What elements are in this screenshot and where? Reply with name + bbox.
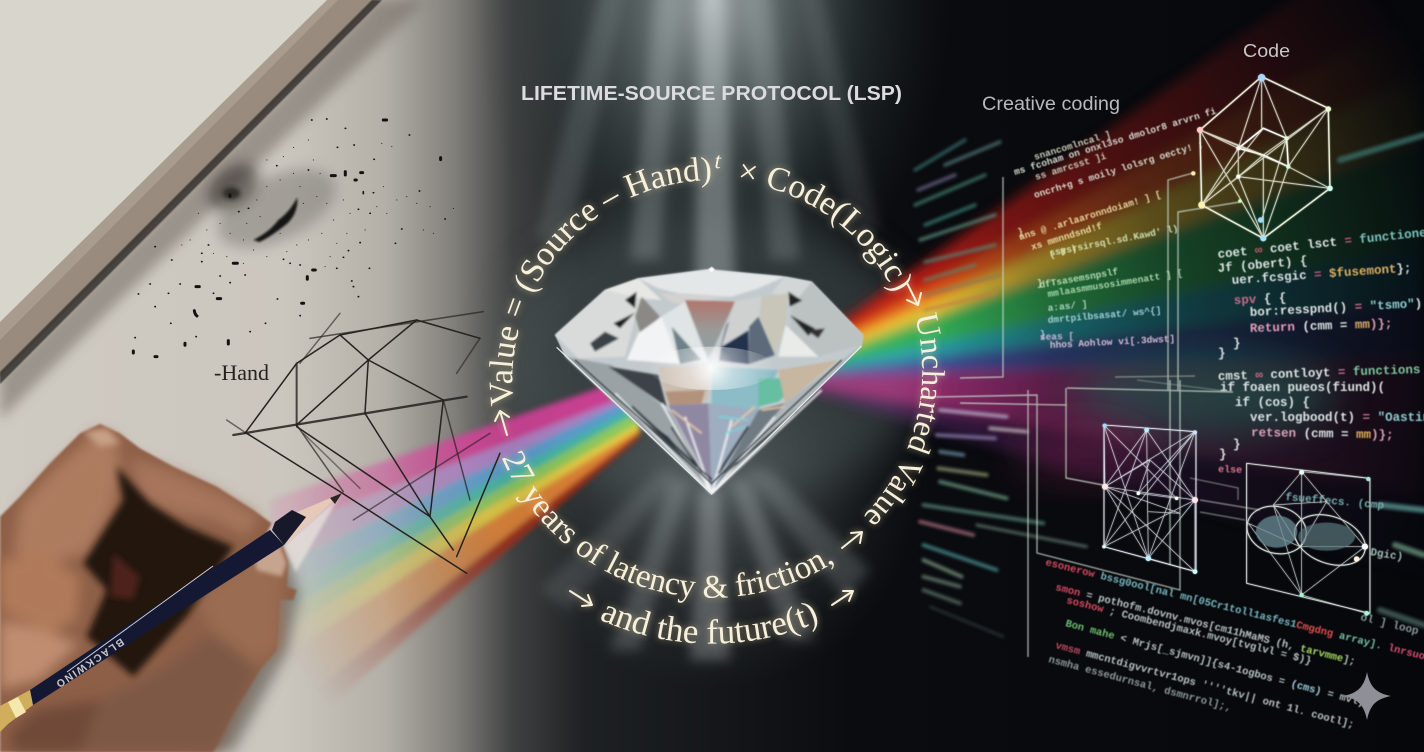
code block: main functions column: else	[1218, 464, 1242, 477]
arrow: into future line	[570, 591, 592, 606]
right rainbow beam	[812, 0, 1420, 531]
code block: creative coding column: ssysrsirsql.sd.Kawd' l)	[1048, 223, 1179, 259]
brilliant center flare	[648, 347, 775, 390]
code block: main functions column: }	[1219, 448, 1227, 462]
teal glow behind the lattice	[1075, 353, 1335, 437]
code block: creative coding column: snancomlncal ]	[1033, 129, 1112, 163]
code block: main functions column	[1217, 225, 1424, 638]
code block: creative coding column: ( 8 )	[1048, 243, 1078, 261]
code block: bottom perspective lines: smon = pothofm.dovnv.mvos[cm11hMaMS (h, tarvmme];	[1054, 582, 1357, 669]
faint code columns	[915, 135, 1424, 637]
label: -Hand: -Hand	[214, 360, 269, 385]
code block: main functions column: ol ] loop	[1359, 612, 1420, 638]
code block: creative coding column: }	[1017, 226, 1024, 238]
arrow: friction to value	[842, 532, 862, 548]
code block: creative coding column: seas [	[1040, 331, 1074, 343]
code block: main functions column: spv { {	[1233, 291, 1287, 308]
graphite dust	[133, 119, 454, 357]
ambient halo behind the diamond	[495, 210, 925, 510]
code block: main functions column: fsueffecs. (cmp	[1285, 492, 1385, 513]
code block: creative coding column: }	[1037, 278, 1043, 289]
label: Code: Code	[1243, 41, 1290, 61]
ring: 27 years of latency: 27 years of latency & friction,	[500, 450, 837, 606]
code block: bottom perspective lines: vmsm mmcntdigvvrtvr1ops ''''tkv|| ont 1l. cootl];	[1054, 640, 1355, 732]
code block: creative coding column: dmrtpilbsasat/ ws^{]	[1047, 305, 1162, 326]
code block: bottom perspective lines	[1044, 557, 1424, 732]
code block: bottom perspective lines: Bon mahe < Mrjs[_sjmvn]]{s4-1ogbos = (cms) = mvl);	[1064, 618, 1371, 711]
code block: bottom perspective lines: nsmha essedurnsal, dsmnrrol];,	[1047, 654, 1233, 715]
code block: creative coding column: ms fcoham on onxl3so dmolor8 arvrn fi	[1013, 106, 1218, 178]
code block: main functions column: if (cos) {	[1235, 396, 1310, 410]
code block: creative coding column: ans @ .arlaaronndoiam! ] [	[1018, 189, 1163, 243]
code block: creative coding column: a:as/ ]	[1047, 299, 1088, 314]
shadow under the hand	[187, 543, 300, 752]
code block: main functions column: Return (cmm = mm)};	[1250, 317, 1393, 336]
code block: bottom perspective lines: soshow ; Coombendjmaxk.mvoy[tvglvl = $)}	[1065, 595, 1313, 668]
pencil brand text: BLACKWINO	[54, 636, 126, 690]
top light glow	[430, 0, 1030, 340]
wireframe: organic form in frame	[1242, 463, 1372, 616]
crown facets	[555, 290, 640, 358]
arrow: out of future line	[832, 591, 853, 605]
book corner	[0, 0, 382, 384]
formula ring	[487, 154, 947, 647]
code block: main functions column: Jf (obert) {	[1217, 254, 1308, 276]
code block: creative coding column: dfTsasemsnpslf	[1039, 266, 1119, 291]
arrow: into uncharted	[907, 283, 921, 305]
connector frames	[936, 173, 1260, 657]
shadow under pencil tip	[284, 495, 340, 572]
ring: value equation: × Code(Logic)	[740, 163, 914, 294]
ring: value equation: Value = (Source – Hand)	[487, 154, 714, 407]
central diamond	[555, 267, 863, 494]
sparkle watermark	[1343, 672, 1391, 720]
ring arrows	[495, 283, 921, 606]
hand holding a pencil	[0, 424, 300, 752]
code block: main functions column: if foaen pueos(fiund)(	[1220, 381, 1385, 395]
code block: creative coding column: oncrh+g s moily lolsrg oecty! ;	[1033, 139, 1205, 201]
girdle and pavilion facets	[565, 357, 712, 494]
code block: main functions column: Dgic)	[1369, 547, 1404, 564]
deep magenta glow	[1015, 420, 1155, 480]
ring: uncharted value: Uncharted Value	[862, 312, 947, 528]
code block: creative coding column: }	[1040, 329, 1046, 340]
code block: creative coding column: xs mmnndsnd!f	[1030, 221, 1104, 253]
ring: value equation: t	[713, 155, 722, 170]
code block: creative coding column	[1013, 106, 1218, 351]
arrow: 27 years to value	[495, 411, 509, 435]
code block: main functions column: retsen (cmm = mm)};	[1251, 426, 1394, 442]
code block: creative coding column: ss amrcsst ]i	[1034, 151, 1108, 183]
wireframe: code polyhedron	[1191, 74, 1333, 241]
light rays below the diamond	[490, 270, 934, 700]
code block: creative coding column: mmlaasmmusosimmenatt ] [	[1047, 268, 1184, 300]
code block: main functions column: uer.fcsgic = $fusemont};	[1231, 261, 1412, 288]
label: Creative coding: Creative coding	[982, 94, 1120, 115]
wireframe: neural lattice	[1102, 424, 1198, 574]
code block: creative coding column: hhos Aohlow vi[.3dwst]	[1050, 333, 1175, 351]
code block: main functions column: }	[1233, 438, 1241, 452]
shadow cast by the book	[0, 0, 425, 420]
heading: Lifetime-Source Protocol: LIFETIME-SOURCE PROTOCOL (LSP)	[521, 83, 902, 105]
pencil sketch of a diamond	[227, 312, 500, 573]
pencil	[0, 493, 342, 732]
light rays from above	[535, 0, 880, 280]
code block: main functions column: }	[1218, 347, 1226, 361]
code block: main functions column: }	[1233, 337, 1241, 351]
left rainbow beam	[270, 386, 644, 692]
pavilion sparkle streaks	[615, 390, 822, 493]
ring: and the future: and the future(t)	[598, 600, 822, 647]
